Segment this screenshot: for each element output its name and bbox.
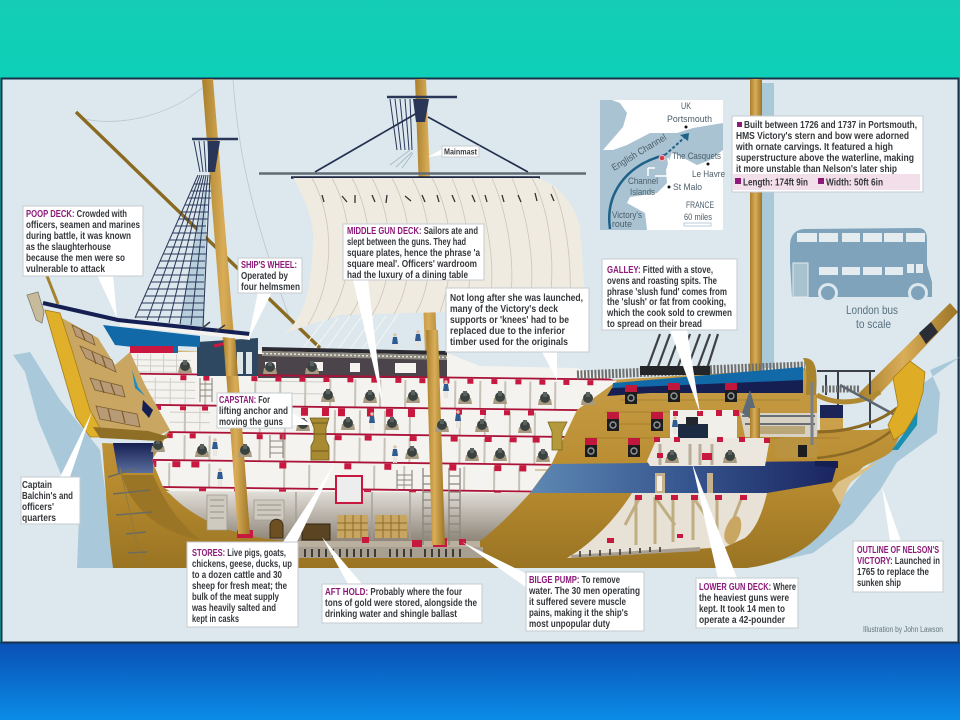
hold <box>166 468 530 558</box>
label: lower gun deck <box>692 463 798 628</box>
label: lower gun deck: operate a 42-pounder <box>699 614 785 626</box>
label: lower gun deck: LOWER GUN DECK: Where <box>699 581 796 593</box>
arched door <box>270 519 283 538</box>
orlop window <box>567 493 767 558</box>
label: galley: which the cook sold to crewmen <box>606 307 732 319</box>
bus caption <box>846 303 898 331</box>
label: poop deck: POOP DECK: Crowded with <box>26 208 127 220</box>
label: poop deck <box>23 206 143 318</box>
label: middle gun deck: had the luxury of a dining table <box>347 269 468 281</box>
bottom blue band <box>0 642 960 720</box>
label: poop deck: during battle, it was known <box>26 230 131 242</box>
label: poop deck: vulnerable to attack <box>26 263 105 275</box>
map: UK land <box>603 100 723 150</box>
label: captain's quarters: Captain <box>22 479 52 491</box>
map inset: The Casquets <box>672 151 721 162</box>
mizzen mast <box>202 79 250 534</box>
info box: ship facts: Width: 50ft 6in <box>826 176 883 188</box>
callout: knees note: many of the Victory's deck <box>450 303 558 315</box>
label: captain's quarters <box>21 412 92 524</box>
map inset <box>600 100 725 230</box>
label: stores: to a dozen cattle and 30 <box>192 569 282 581</box>
label: galley: the 'slush' or fat from cooking, <box>607 296 726 308</box>
info box: ship facts: with ornate carvings. It featured a high <box>735 141 893 153</box>
info box: ship facts: Built between 1726 and 1737 in Portsmouth, <box>744 119 917 131</box>
cutaway interior decks <box>124 350 617 503</box>
label: stores <box>187 463 335 627</box>
lower mizzen mast through decks <box>224 345 250 534</box>
callout: knees note: timber used for the originals <box>450 336 568 348</box>
red-framed room <box>336 476 362 503</box>
deck ladders <box>200 378 412 490</box>
upper deck rail and netting <box>262 347 447 360</box>
label: capstan: CAPSTAN: For <box>219 394 270 406</box>
map inset: Victory's <box>612 210 642 221</box>
second capstan <box>548 422 567 450</box>
info box: ship facts: HMS Victory's stern and bow were adorned <box>736 130 909 142</box>
map inset: UK <box>681 101 691 112</box>
spanker yard <box>76 112 320 348</box>
label: bilge pump: it suffered severe muscle <box>529 596 626 608</box>
illustration credit: Illustration by John Lawson <box>863 625 943 634</box>
ship's wheel area <box>197 338 258 376</box>
stern flagstaff <box>47 276 58 304</box>
carved gold quarter <box>45 310 105 437</box>
info box: ship facts: it more unstable than Nelson's later ship <box>736 163 897 175</box>
blue hull band <box>530 461 838 493</box>
label: aft hold <box>322 537 482 623</box>
bow gold rails <box>818 408 897 432</box>
stern lantern <box>27 292 44 323</box>
figurehead <box>888 361 925 440</box>
label: ship's wheel: Operated by <box>241 270 288 282</box>
galley <box>670 410 739 438</box>
label: galley: GALLEY: Fitted with a stove, <box>607 264 713 276</box>
map inset: St Malo <box>673 182 702 193</box>
fore deck netting <box>577 366 805 375</box>
bowsprit <box>858 303 958 402</box>
cabin panelling <box>125 354 326 432</box>
label: stores: kept in casks <box>192 613 239 625</box>
map: France land <box>627 150 723 230</box>
mast backdrop: outline of Nelson's foremast <box>761 83 774 368</box>
map inset: Islands <box>630 187 655 198</box>
label: capstan: moving the guns <box>219 416 283 428</box>
map: route <box>609 155 665 229</box>
label: lower gun deck: kept. It took 14 men to <box>699 603 785 615</box>
bow railing frame <box>817 371 875 430</box>
map inset: Portsmouth <box>667 114 712 125</box>
capstan <box>310 418 329 460</box>
label: bilge pump: water. The 30 men operating <box>528 585 640 597</box>
label: stores: sheep for fresh meat; the <box>192 580 287 592</box>
bow <box>812 361 925 505</box>
main top <box>315 97 528 172</box>
info box: ship facts: superstructure above the waterline, making <box>736 152 914 164</box>
label: middle gun deck: slept between the guns. They had <box>347 236 466 248</box>
label: stores: was heavily salted and <box>191 602 276 614</box>
casks <box>337 515 407 538</box>
outline of Nelson's Victory silhouette <box>13 352 960 568</box>
dark upper deck band <box>258 354 447 378</box>
top teal band <box>0 0 960 78</box>
callout: knees note: replaced due to the inferior <box>450 325 565 337</box>
stern gallery <box>27 292 170 441</box>
gallery windows <box>72 325 140 427</box>
illustration panel <box>2 78 958 642</box>
bow teal trim <box>892 405 918 450</box>
map inset: 60 miles <box>684 212 712 223</box>
redraw mizzen over wheel area <box>223 335 238 376</box>
label: galley: phrase 'slush fund' comes from <box>607 286 727 298</box>
label: mainmast <box>428 146 479 157</box>
label: middle gun deck <box>343 224 484 407</box>
deck stanchions <box>169 377 555 492</box>
bus caption: London bus <box>846 303 898 317</box>
bus caption: to scale <box>856 317 891 331</box>
label: middle gun deck: MIDDLE GUN DECK: Sailors ate and <box>347 225 478 237</box>
label: middle gun deck: square plates, hence the phrase 'a <box>347 247 480 259</box>
label: stores: bulk of the meat supply <box>192 591 279 603</box>
poop deck side <box>43 303 250 353</box>
label: capstan <box>217 393 312 428</box>
lower main mast through decks <box>426 330 445 545</box>
label: poop deck: because the men were so <box>26 252 125 264</box>
label: bilge pump: BILGE PUMP: To remove <box>529 574 620 586</box>
label: lower gun deck: the heaviest guns were <box>699 592 789 604</box>
label: captain's quarters: Balchin's and <box>22 490 73 502</box>
stacked guns on fore deck <box>640 334 718 375</box>
main sail <box>285 177 585 333</box>
label: poop deck: officers, seamen and marines <box>26 219 140 231</box>
upper hull planking <box>535 400 840 470</box>
label: ship's wheel: SHIP'S WHEEL: <box>241 259 297 271</box>
info box: ship facts: Length: 174ft 9in <box>743 176 808 188</box>
fore mast <box>750 79 762 519</box>
label: aft hold: tons of gold were stored, alongside the <box>325 597 477 609</box>
mast step knees <box>237 530 466 547</box>
map inset: FRANCE <box>686 200 714 211</box>
label: capstan: lifting anchor and <box>219 405 288 417</box>
ropes below the sail <box>300 314 398 352</box>
label: mainmast: Mainmast <box>444 148 477 156</box>
lower gun deck <box>647 437 770 493</box>
label: ship's wheel: four helmsmen <box>241 281 300 293</box>
label: poop deck: as the slaughterhouse <box>26 241 111 253</box>
mizzen top and rigging net <box>135 139 238 328</box>
info box: ship facts <box>732 116 923 192</box>
label: stores: STORES: Live pigs, goats, <box>192 547 286 559</box>
main yard <box>259 174 586 178</box>
upper deck windows <box>265 362 416 373</box>
label: outline of Nelson's Victory: sunken ship <box>857 577 901 589</box>
label: captain's quarters: quarters <box>22 512 56 524</box>
label: outline of Nelson's Victory: 1765 to replace the <box>857 566 929 578</box>
stern rudder <box>108 443 200 566</box>
hold bulkheads <box>207 495 284 530</box>
bilge strip <box>298 547 483 558</box>
label: bilge pump <box>462 542 644 631</box>
map inset: Channel <box>628 176 658 187</box>
label: aft hold: drinking water and shingle ballast <box>325 608 457 620</box>
hull base <box>102 350 905 568</box>
map: Channel Islands inset <box>648 158 670 176</box>
callout: knees note: Not long after she was launched, <box>450 292 583 304</box>
label: captain's quarters: officers' <box>22 501 54 513</box>
callout: knees note <box>446 288 589 380</box>
gun ports <box>585 383 737 457</box>
label: outline of Nelson's Victory: VICTORY: Launched in <box>857 555 940 567</box>
callout: knees note: supports or 'knees' had to be <box>450 314 569 326</box>
map inset: English Channel <box>610 132 669 174</box>
ladders to hold <box>423 468 460 545</box>
label: aft hold: AFT HOLD: Probably where the four <box>325 586 462 598</box>
label: outline of Nelson's Victory <box>853 487 943 592</box>
forward structures <box>740 358 817 520</box>
label: galley: to spread on their bread <box>607 318 702 330</box>
label: ship's wheel <box>238 258 302 340</box>
deck lines <box>124 374 615 493</box>
figures in rigging <box>392 330 421 351</box>
forecastle netting <box>822 386 860 392</box>
map inset: Le Havre <box>692 169 725 180</box>
label: bilge pump: most unpopular duty <box>529 618 610 630</box>
main mast <box>415 79 445 545</box>
upper blue wale <box>607 367 803 396</box>
label: middle gun deck: square meal'. Officers' wardroom <box>347 258 477 270</box>
deck knees <box>149 375 593 502</box>
label: galley: ovens and roasting spits. The <box>607 275 717 287</box>
label: galley <box>602 259 737 413</box>
icon: London bus <box>790 228 932 303</box>
label: bilge pump: pains, making it the ship's <box>529 607 628 619</box>
thin background rigging <box>80 80 292 325</box>
crew figures <box>212 352 461 486</box>
map inset: route <box>612 219 632 230</box>
cannons <box>151 360 595 462</box>
forecastle rail <box>817 392 880 402</box>
label: stores: chickens, geese, ducks, up <box>192 558 292 570</box>
gold chest <box>302 524 330 540</box>
